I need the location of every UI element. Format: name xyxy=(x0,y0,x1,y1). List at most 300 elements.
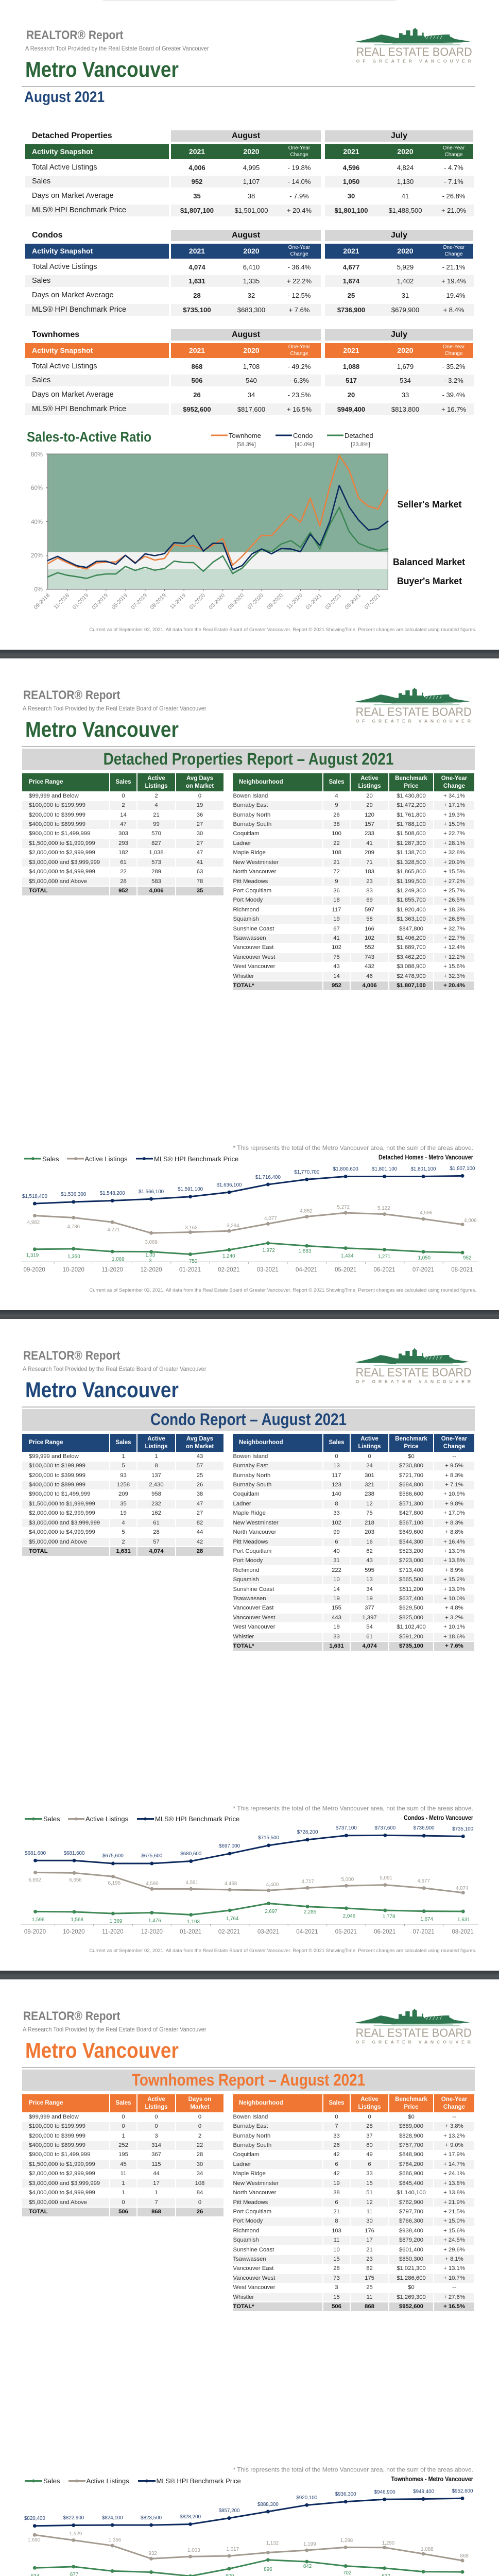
table: townhomes by price range: 84 xyxy=(197,2190,203,2196)
snapshot table: condos: Condos xyxy=(32,231,63,240)
table: townhomes by neighbourhood: + 13.8% xyxy=(443,2190,465,2196)
snapshot table: condos: - 12.5% xyxy=(288,292,311,299)
table: townhomes by neighbourhood: Benchmark xyxy=(395,2096,427,2102)
table: detached by price range: $100,000 to $199,999 xyxy=(29,802,85,808)
table: townhomes by price range: $3,000,000 and $3,999,999 xyxy=(29,2180,100,2187)
table: townhomes by neighbourhood: West Vancouver xyxy=(233,2284,275,2291)
table: detached by price range: 19 xyxy=(197,802,203,808)
table: townhomes by price range: 115 xyxy=(151,2161,161,2167)
snapshot table: condos: July xyxy=(391,231,407,240)
table: condo by neighbourhood: 19 xyxy=(333,1624,340,1630)
table: detached by neighbourhood: + 15.5% xyxy=(443,869,465,875)
snapshot table: condos: 1,631 xyxy=(188,277,205,285)
logo xyxy=(355,687,472,724)
snapshot table: townhomes: One-Year xyxy=(288,344,310,350)
table: detached by price range: 182 xyxy=(118,850,128,856)
active listings labels: 4,677 xyxy=(417,1878,430,1884)
sales labels: 1,476 xyxy=(148,1918,161,1924)
snapshot table: townhomes: + 16.7% xyxy=(441,405,466,413)
report title band: Condo Report – August 2021 xyxy=(150,1410,347,1429)
legend: MLS® HPI Benchmark Price xyxy=(155,1815,239,1823)
table: detached by neighbourhood: 183 xyxy=(365,869,374,875)
snapshot table: detached: 2021 xyxy=(343,147,359,156)
sales labels: 842 xyxy=(303,2564,312,2569)
table: detached by neighbourhood: 102 xyxy=(332,944,341,951)
x axis labels: 11-2020 xyxy=(286,592,304,611)
table: condo by neighbourhood: 31 xyxy=(333,1557,340,1564)
table: detached by neighbourhood: + 26.8% xyxy=(443,916,465,922)
table: townhomes by price range: 2 xyxy=(198,2133,201,2139)
report title band xyxy=(22,1409,475,1431)
table: condo by neighbourhood: Tsawwassen xyxy=(233,1596,266,1602)
table: condo by neighbourhood: 62 xyxy=(366,1548,373,1554)
table: townhomes by neighbourhood: Squamish xyxy=(233,2237,259,2243)
snapshot table: detached: 2020 xyxy=(397,147,414,156)
table: townhomes by price range xyxy=(22,2094,223,2216)
table: detached by neighbourhood: $1,199,500 xyxy=(397,878,426,884)
table: condo by price range: Avg Days xyxy=(186,1435,213,1442)
table: townhomes by price range: 17 xyxy=(153,2180,160,2187)
active listings labels: 4,468 xyxy=(225,1881,237,1887)
x axis labels: 05-2019 xyxy=(110,592,129,611)
sales labels: 1,764 xyxy=(226,1916,239,1922)
table: detached by neighbourhood: 58 xyxy=(366,916,373,922)
snapshot table: townhomes: 2020 xyxy=(243,346,260,354)
table: detached by neighbourhood: $2,478,900 xyxy=(397,973,426,979)
table: condo by neighbourhood: $723,000 xyxy=(399,1557,423,1564)
snapshot table: condos: 4,677 xyxy=(343,263,359,271)
table: condo by neighbourhood: 102 xyxy=(332,1520,341,1526)
table: condo by neighbourhood: West Vancouver xyxy=(233,1624,275,1630)
table: condo by price range: 28 xyxy=(153,1529,160,1535)
region title: Metro Vancouver xyxy=(25,57,179,81)
table: condo by price range: 35 xyxy=(120,1501,127,1507)
table: detached by neighbourhood: West Vancouver xyxy=(233,963,275,970)
table: townhomes by neighbourhood: + 13.2% xyxy=(443,2133,465,2139)
table: condo by price range: 27 xyxy=(197,1510,203,1516)
table: detached by neighbourhood: 4,006 xyxy=(362,982,377,989)
plot: bands and lines xyxy=(46,454,388,590)
active listings labels: 4,590 xyxy=(146,1881,159,1887)
table: detached by price range: Active xyxy=(147,775,165,781)
logo: REAL ESTATE BOARD xyxy=(356,45,472,58)
sales labels: 1,050 xyxy=(418,1255,431,1261)
table: townhomes by neighbourhood: + 10.7% xyxy=(443,2275,465,2281)
table: condo by neighbourhood xyxy=(233,1434,474,1651)
table: condo by neighbourhood: 123 xyxy=(332,1482,341,1488)
table: condo by price range: 232 xyxy=(151,1501,161,1507)
chart: sales-to-active ratio xyxy=(27,429,465,611)
snapshot table: condos: 1,674 xyxy=(343,277,359,285)
table: condo by price range: Sales xyxy=(115,1439,131,1446)
table: condo by neighbourhood: 218 xyxy=(365,1520,374,1526)
table: condo by neighbourhood: $721,700 xyxy=(399,1472,423,1479)
table: townhomes by neighbourhood: 15 xyxy=(333,2294,340,2300)
table: townhomes by price range: Listings xyxy=(145,2104,168,2110)
active listings labels: 868 xyxy=(460,2553,469,2559)
snapshot table: condos: + 8.4% xyxy=(443,306,464,313)
table: townhomes by neighbourhood: $1,021,300 xyxy=(397,2265,426,2272)
legend xyxy=(25,1815,239,1823)
table: townhomes by price range: Price Range xyxy=(29,2100,63,2106)
y axis labels: 20% xyxy=(31,553,43,559)
legend: Active Listings xyxy=(84,1155,128,1163)
tagline: A Research Tool Provided by the Real Estate Board of Greater Vancouver xyxy=(23,1365,207,1372)
table: detached by price range: 47 xyxy=(197,850,203,856)
table: townhomes by neighbourhood: New Westminster xyxy=(233,2180,279,2187)
report title band: Townhomes Report – August 2021 xyxy=(132,2071,365,2089)
table: detached by neighbourhood: $1,508,600 xyxy=(397,831,426,837)
table: townhomes by neighbourhood: Active xyxy=(360,2096,378,2102)
snapshot table: detached: 1,130 xyxy=(397,178,414,185)
table: townhomes by price range: $400,000 to $899,999 xyxy=(29,2142,85,2148)
table: condo by neighbourhood: $511,200 xyxy=(399,1586,423,1592)
active listings labels: 1,088 xyxy=(421,2547,434,2552)
table: condo by neighbourhood: 321 xyxy=(365,1482,374,1488)
table: detached by price range: 4 xyxy=(154,802,158,808)
page 1 header xyxy=(22,28,475,87)
table: condo by neighbourhood: 75 xyxy=(366,1510,373,1516)
total note: * This represents the total of the Metro Vancouver area, not the sum of the areas above. xyxy=(233,2466,473,2473)
snapshot table: detached: - 19.8% xyxy=(288,164,311,171)
table: detached by price range: 583 xyxy=(151,878,161,884)
x axis labels: 01-2021 xyxy=(304,592,323,611)
table: townhomes by price range: $200,000 to $399,999 xyxy=(29,2133,85,2139)
chart title: Townhomes - Metro Vancouver xyxy=(391,2476,473,2483)
x axis labels: 03-2021 xyxy=(257,1267,279,1273)
table: detached by neighbourhood: 743 xyxy=(365,954,374,960)
table: condo by neighbourhood: $565,500 xyxy=(399,1577,423,1583)
table: detached by neighbourhood: $1,249,300 xyxy=(397,888,426,894)
snapshot table: townhomes: - 39.4% xyxy=(442,391,465,399)
table: townhomes by price range: 195 xyxy=(118,2151,128,2158)
table: condo by price range: 4 xyxy=(122,1520,125,1526)
table: detached by price range: 0 xyxy=(122,793,125,799)
x axis labels: 03-2021 xyxy=(324,592,342,611)
table: townhomes by neighbourhood: Tsawwassen xyxy=(233,2256,266,2262)
plot lines xyxy=(21,1835,478,1926)
table: condo by price range: $1,500,000 to $1,999,999 xyxy=(29,1501,95,1507)
x axis labels: 02-2021 xyxy=(218,1929,240,1935)
active listings labels: 4,596 xyxy=(420,1210,433,1216)
table: condo by price range: 4,074 xyxy=(149,1548,164,1554)
table: townhomes by neighbourhood: 26 xyxy=(333,2142,340,2148)
active listings labels: 5,272 xyxy=(337,1205,350,1210)
benchmark price labels: $681,600 xyxy=(64,1851,85,1856)
table: condo by neighbourhood: $649,600 xyxy=(399,1529,423,1535)
table: condo by price range: 57 xyxy=(153,1538,160,1545)
table: condo by neighbourhood: $567,100 xyxy=(399,1520,423,1526)
table: detached by neighbourhood: $1,287,300 xyxy=(397,840,426,846)
table: townhomes by neighbourhood: $938,400 xyxy=(399,2228,423,2234)
snapshot table: condos: 2020 xyxy=(397,246,414,255)
active listings labels: 6,692 xyxy=(28,1877,41,1883)
table: townhomes by neighbourhood: $952,600 xyxy=(399,2303,423,2310)
snapshot table: condos: 1,335 xyxy=(243,277,260,285)
y axis labels xyxy=(31,452,43,593)
table: detached by neighbourhood: $3,462,200 xyxy=(397,954,426,960)
benchmark price labels: $824,100 xyxy=(102,2515,123,2521)
x axis labels: 07-2020 xyxy=(246,592,265,611)
report label: REALTOR® Report xyxy=(23,2009,121,2023)
x axis labels: 10-2020 xyxy=(63,1929,85,1935)
snapshot table: condos: Activity Snapshot xyxy=(32,246,93,255)
snapshot table: detached: 38 xyxy=(248,192,255,200)
report title band: Detached Properties Report – August 2021 xyxy=(104,750,393,768)
table: townhomes by neighbourhood: + 17.9% xyxy=(443,2151,465,2158)
table: detached by price range: 47 xyxy=(120,821,127,827)
table: townhomes by price range: $2,000,000 to $2,999,999 xyxy=(29,2171,95,2177)
table: condo by price range: 137 xyxy=(151,1472,161,1479)
table: detached by neighbourhood: 36 xyxy=(333,888,340,894)
table: condo by price range: 1258 xyxy=(117,1482,130,1488)
table: townhomes by neighbourhood: Burnaby North xyxy=(233,2133,270,2139)
snapshot table: townhomes: One-Year xyxy=(443,344,464,350)
table: condo by neighbourhood: 14 xyxy=(333,1586,340,1592)
table: detached by neighbourhood: Listings xyxy=(358,783,381,789)
table: condo by price range: 2,430 xyxy=(149,1482,164,1488)
benchmark price labels: $1,807,100 xyxy=(450,1166,475,1172)
table: detached by price range: 2 xyxy=(122,802,125,808)
table: detached by neighbourhood: $847,800 xyxy=(399,926,423,932)
snapshot table: detached: - 26.8% xyxy=(442,192,465,200)
table: detached by price range: 61 xyxy=(120,859,127,866)
table: townhomes by price range: 868 xyxy=(151,2209,161,2215)
active listings labels: 4,982 xyxy=(27,1220,40,1225)
table: detached by neighbourhood: 100 xyxy=(332,831,341,837)
benchmark price labels: $823,500 xyxy=(141,2515,162,2521)
table: condo by neighbourhood: 8 xyxy=(335,1501,338,1507)
benchmark price labels: $920,100 xyxy=(296,2495,318,2501)
snapshot table: condos: 1,402 xyxy=(397,277,414,285)
table: detached by neighbourhood: 597 xyxy=(365,907,374,913)
table: townhomes by neighbourhood: Sales xyxy=(329,2100,345,2106)
table: townhomes by neighbourhood: Neighbourhood xyxy=(239,2100,283,2106)
table: condo by neighbourhood: + 8.8% xyxy=(445,1529,463,1535)
table: detached by price range: 827 xyxy=(151,840,161,846)
snapshot table: townhomes: MLS® HPI Benchmark Price xyxy=(32,405,126,413)
snapshot table: condos: 5,929 xyxy=(397,263,414,271)
table: detached by price range: Sales xyxy=(115,779,131,785)
snapshot table: townhomes: - 3.2% xyxy=(444,377,463,384)
table: condo by neighbourhood: Port Coquitlam xyxy=(233,1548,271,1554)
tagline: A Research Tool Provided by the Real Estate Board of Greater Vancouver xyxy=(25,45,209,52)
table: townhomes by price range: $4,000,000 to $4,999,999 xyxy=(29,2190,95,2196)
snapshot table: detached: 4,995 xyxy=(243,164,260,171)
total note: * This represents the total of the Metro Vancouver area, not the sum of the areas above. xyxy=(233,1805,473,1812)
table: condo by neighbourhood: 16 xyxy=(366,1538,373,1545)
table: townhomes by neighbourhood: 7 xyxy=(335,2123,338,2129)
table: townhomes by neighbourhood: 11 xyxy=(367,2294,372,2300)
page divider band xyxy=(0,1971,499,1979)
table: condo by neighbourhood: + 7.1% xyxy=(445,1482,463,1488)
x axis labels: 02-2021 xyxy=(218,1267,239,1273)
active listings labels: 1,003 xyxy=(187,2548,200,2553)
table: condo by neighbourhood: 0 xyxy=(335,1453,338,1460)
region title: Metro Vancouver xyxy=(25,717,179,741)
table: townhomes by neighbourhood: $828,900 xyxy=(399,2133,423,2139)
snapshot table: townhomes: Days on Market Average xyxy=(32,391,114,399)
table: townhomes by neighbourhood: + 27.6% xyxy=(443,2294,465,2300)
table: townhomes by price range: $5,000,000 and Above xyxy=(29,2199,87,2205)
snapshot table: condos: 4,074 xyxy=(188,263,205,271)
benchmark price labels: $735,100 xyxy=(452,1826,474,1832)
table: townhomes by neighbourhood: 28 xyxy=(333,2265,340,2272)
table: townhomes by price range: 1 xyxy=(122,2133,125,2139)
table: detached by neighbourhood: + 27.2% xyxy=(443,878,465,884)
table: townhomes by neighbourhood: 11 xyxy=(367,2209,372,2215)
table: condo by neighbourhood: Vancouver East xyxy=(233,1605,273,1611)
sales labels: 896 xyxy=(264,2567,272,2572)
snapshot table: townhomes: 34 xyxy=(248,391,255,399)
snapshot table: townhomes: $952,600 xyxy=(183,405,211,413)
table: detached by price range: 99 xyxy=(153,821,160,827)
logo: OF GREATER VANCOUVER xyxy=(356,2040,471,2045)
snapshot table: detached: Sales xyxy=(32,177,50,185)
table: detached by neighbourhood: 83 xyxy=(366,888,373,894)
table: townhomes by neighbourhood: 175 xyxy=(365,2275,374,2281)
table: condo by neighbourhood: 12 xyxy=(366,1501,373,1507)
table: townhomes by neighbourhood: Coquitlam xyxy=(233,2151,259,2158)
table: condo by neighbourhood: Burnaby North xyxy=(233,1472,270,1479)
table: detached by neighbourhood: + 32.8% xyxy=(443,850,465,856)
x axis labels: 09-2020 xyxy=(24,1929,46,1935)
table: condo by neighbourhood: 155 xyxy=(332,1605,341,1611)
table: townhomes by neighbourhood: Richmond xyxy=(233,2228,259,2234)
table: townhomes by price range: $100,000 to $199,999 xyxy=(29,2123,85,2129)
sales labels: 750 xyxy=(189,1259,198,1264)
table: detached by neighbourhood: + 22.7% xyxy=(443,935,465,941)
x axis labels: 05-2021 xyxy=(335,1267,356,1273)
active listings labels: 4,591 xyxy=(185,1880,198,1886)
snapshot table: detached: - 4.7% xyxy=(444,164,463,171)
table: condo by price range: 1,631 xyxy=(116,1548,131,1554)
active listings labels: 1,017 xyxy=(227,2547,239,2552)
snapshot table: detached: $1,501,000 xyxy=(234,206,268,214)
snapshot table: detached: 2021 xyxy=(189,147,205,156)
table: detached by price range: $2,000,000 to $2,999,999 xyxy=(29,850,95,856)
table: townhomes by neighbourhood: 12 xyxy=(366,2199,373,2205)
table: condo by neighbourhood: 4,074 xyxy=(362,1643,377,1649)
snapshot table: townhomes: 506 xyxy=(192,377,202,384)
snapshot table: townhomes: - 6.3% xyxy=(289,377,309,384)
table: condo by neighbourhood: One-Year xyxy=(441,1435,467,1442)
snapshot table: detached: - 14.0% xyxy=(288,178,311,185)
table: detached by neighbourhood: 71 xyxy=(366,859,373,866)
x axis labels xyxy=(24,1929,474,1935)
table: townhomes by price range: 0 xyxy=(198,2199,201,2205)
x axis labels: 01-2021 xyxy=(179,1267,201,1273)
table: detached by neighbourhood: Whistler xyxy=(233,973,254,979)
benchmark price labels xyxy=(25,1825,474,1859)
table: detached by price range: 27 xyxy=(197,821,203,827)
sales labels: 1,674 xyxy=(420,1917,434,1922)
table: detached by price range: 289 xyxy=(151,869,161,875)
table: condo by price range xyxy=(22,1434,223,1556)
table: townhomes by price range: 26 xyxy=(197,2209,203,2215)
table: townhomes by price range: $99,999 and Below xyxy=(29,2114,79,2120)
snapshot table: detached: One-Year xyxy=(288,145,310,151)
table: townhomes by neighbourhood: $757,700 xyxy=(399,2142,423,2148)
snapshot table: townhomes: 33 xyxy=(402,391,409,399)
active listings labels: 932 xyxy=(148,2551,157,2556)
table: detached by neighbourhood: + 26.5% xyxy=(443,897,465,903)
sales labels: 1,434 xyxy=(341,1253,354,1259)
benchmark price labels: $952,600 xyxy=(452,2488,473,2494)
table: townhomes by neighbourhood: 506 xyxy=(332,2303,341,2310)
table: detached by neighbourhood: Vancouver West xyxy=(233,954,275,960)
snapshot table: detached: Days on Market Average xyxy=(32,192,114,200)
table: detached by neighbourhood: 120 xyxy=(365,812,374,818)
table: condo by neighbourhood: $735,100 xyxy=(399,1643,423,1649)
table: condo by price range: on Market xyxy=(186,1444,214,1450)
table: detached by neighbourhood: $1,138,700 xyxy=(397,850,426,856)
table: detached by neighbourhood: 552 xyxy=(365,944,374,951)
table: townhomes by price range: 506 xyxy=(118,2209,128,2215)
snapshot table: townhomes: 1,708 xyxy=(243,363,260,370)
sales labels xyxy=(31,2564,468,2576)
table: condo by neighbourhood: Vancouver West xyxy=(233,1615,275,1621)
table: detached by price range: $200,000 to $399,999 xyxy=(29,812,85,818)
table: condo by neighbourhood: $591,200 xyxy=(399,1634,423,1640)
table: townhomes by neighbourhood: Price xyxy=(404,2104,419,2110)
table: condo by neighbourhood: Burnaby South xyxy=(233,1482,271,1488)
footnote: Current as of September 02, 2021. All data from the Real Estate Board of Greater Vancouver. Report © 2021 ShowingTime. Percent changes are calculated using rounded figures. xyxy=(89,627,476,633)
table: townhomes by neighbourhood: 176 xyxy=(365,2228,374,2234)
table: townhomes by neighbourhood: $689,000 xyxy=(399,2123,423,2129)
snapshot table: detached: July xyxy=(391,131,407,140)
table: townhomes by neighbourhood: 25 xyxy=(366,2284,373,2291)
sales labels: 1,193 xyxy=(187,1919,200,1925)
table: condo by neighbourhood: 34 xyxy=(366,1586,373,1592)
table: townhomes by neighbourhood: 868 xyxy=(365,2303,374,2310)
snapshot table: condos xyxy=(25,230,474,316)
table: condo by price range: $99,999 and Below xyxy=(29,1453,79,1460)
snapshot table: condos: 2021 xyxy=(189,246,205,255)
benchmark price labels: $1,636,100 xyxy=(216,1182,242,1188)
active listings labels: 4,077 xyxy=(264,1216,277,1222)
table: townhomes by price range: 28 xyxy=(197,2151,203,2158)
x axis labels: 06-2021 xyxy=(374,1929,395,1935)
table: detached by neighbourhood: Coquitlam xyxy=(233,831,259,837)
table: detached by neighbourhood: 46 xyxy=(366,973,373,979)
x axis labels: 01-2020 xyxy=(188,592,207,611)
snapshot table: detached: 4,824 xyxy=(397,164,414,171)
table: townhomes by neighbourhood: Bowen Island xyxy=(233,2114,268,2120)
logo: OF GREATER VANCOUVER xyxy=(356,719,471,724)
table: detached by neighbourhood: $1,807,100 xyxy=(397,982,426,989)
page 2 header xyxy=(22,687,475,747)
table: detached by price range: $1,500,000 to $1,999,999 xyxy=(29,840,95,846)
table: townhomes by neighbourhood: Pitt Meadows xyxy=(233,2199,268,2205)
table: detached by neighbourhood: Neighbourhood xyxy=(239,779,283,785)
table: townhomes by neighbourhood: Change xyxy=(443,2104,465,2110)
table: detached by neighbourhood: 102 xyxy=(365,935,374,941)
market zone labels: Seller's Market xyxy=(398,499,461,510)
snapshot table: condos: Total Active Listings xyxy=(32,263,97,271)
table: detached by price range: 27 xyxy=(197,840,203,846)
table: townhomes by neighbourhood: 6 xyxy=(335,2199,338,2205)
sales labels: 1,663 xyxy=(299,1249,312,1254)
table: detached by price range: 63 xyxy=(197,869,203,875)
x axis labels: 05-2021 xyxy=(343,592,362,611)
table: condo by neighbourhood: 140 xyxy=(332,1491,341,1497)
table: detached by price range: 21 xyxy=(153,812,160,818)
table: condo by neighbourhood: 61 xyxy=(366,1634,373,1640)
table: townhomes by price range: 1 xyxy=(122,2190,125,2196)
table: townhomes by price range: 34 xyxy=(197,2171,203,2177)
table: townhomes by neighbourhood: $850,300 xyxy=(399,2256,423,2262)
